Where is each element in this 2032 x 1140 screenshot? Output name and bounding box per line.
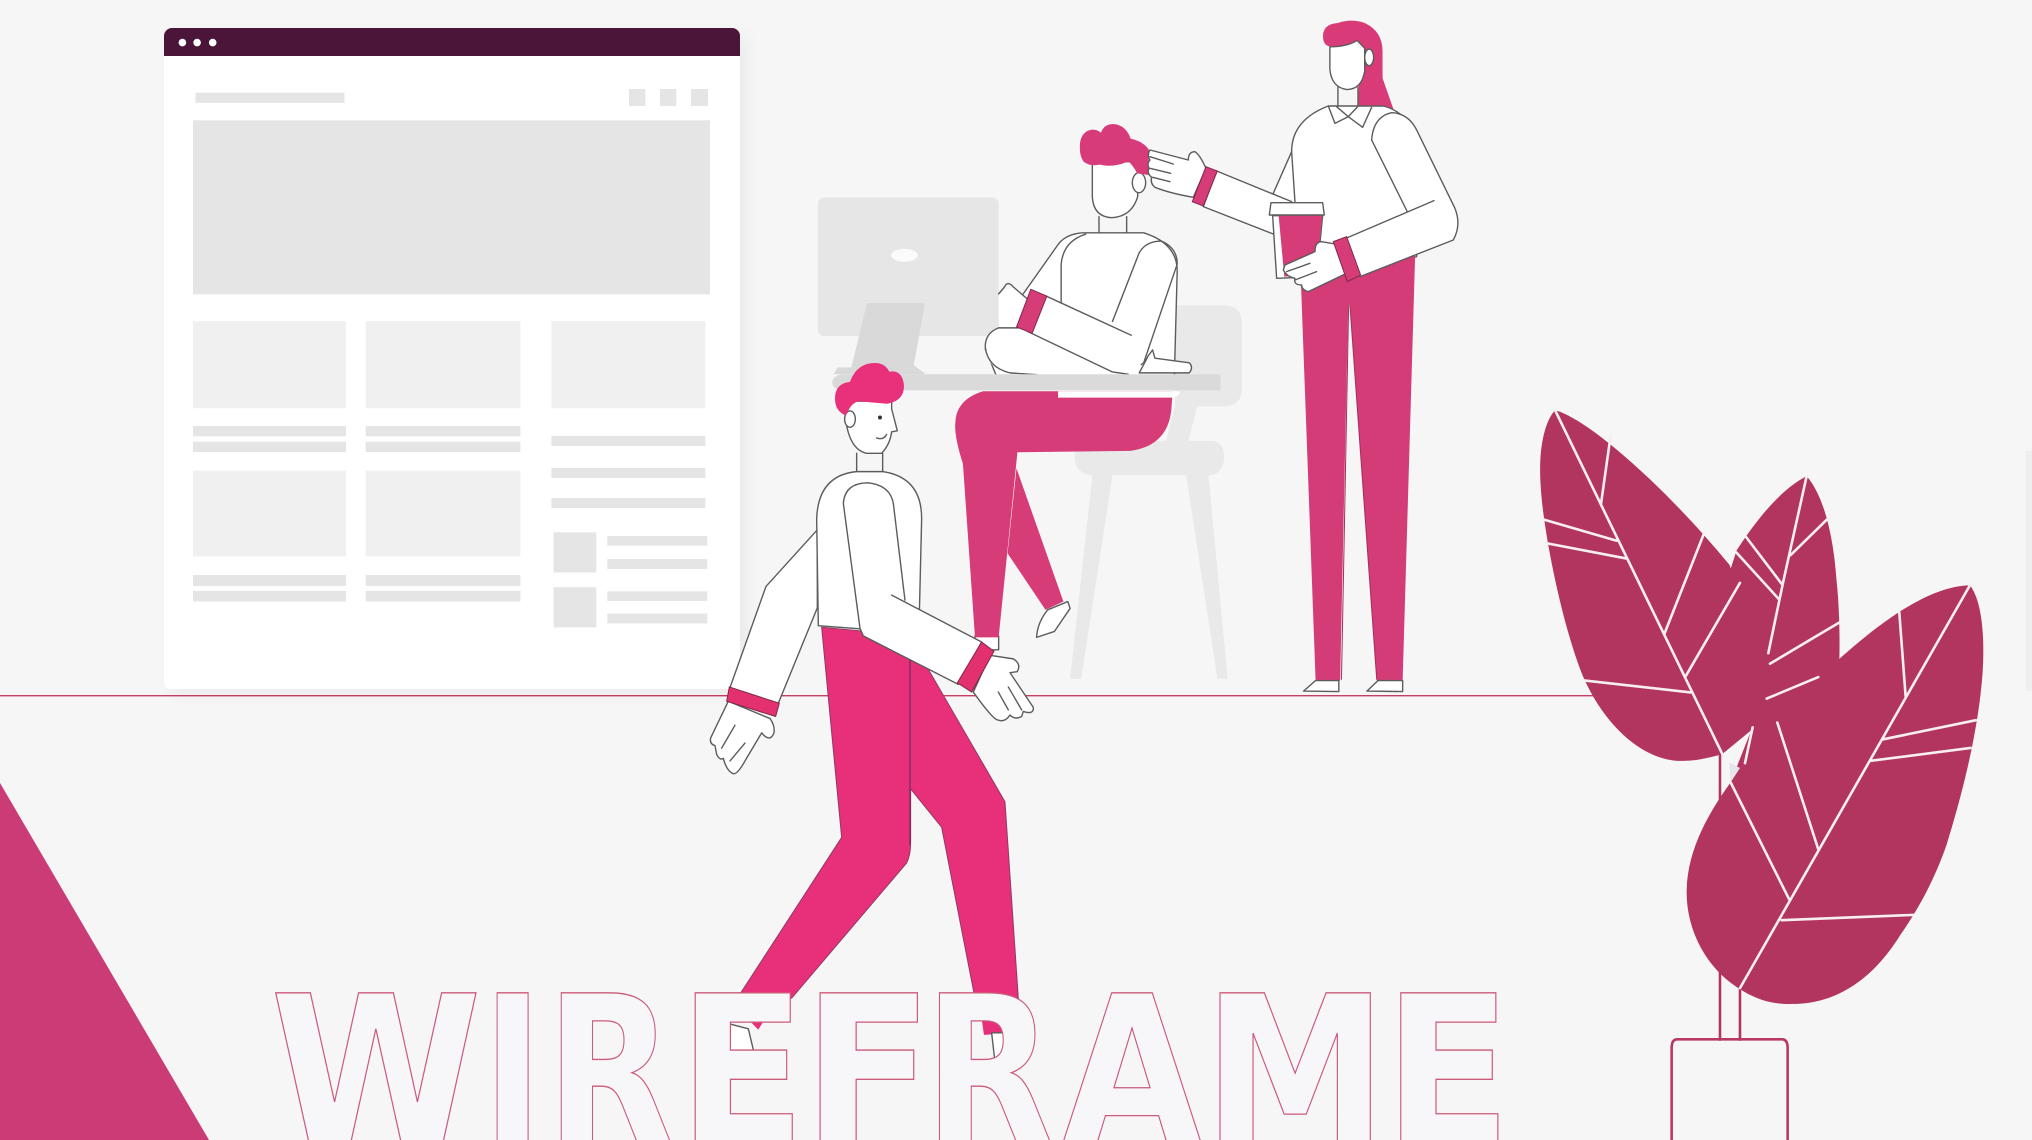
- torso: [985, 233, 1177, 387]
- near cuff: [957, 642, 994, 692]
- shoes: [1304, 681, 1403, 692]
- hair: [835, 363, 904, 416]
- desk: [832, 374, 1221, 390]
- hair: [1323, 21, 1395, 113]
- content cards: [193, 321, 705, 602]
- leaf left: [1540, 410, 1787, 761]
- plant pot: [1672, 1039, 1788, 1140]
- character: walking man: [710, 363, 1033, 1064]
- cuff: [1017, 289, 1047, 333]
- browser title bar: [164, 28, 740, 56]
- leaf veins: [1543, 410, 1976, 988]
- trouser edges: [1341, 305, 1377, 680]
- ear: [1365, 49, 1374, 66]
- head and hair: [1323, 21, 1395, 113]
- feet seen through counters: [725, 1016, 1017, 1064]
- torso: [817, 472, 922, 629]
- cup hand: [1283, 242, 1347, 292]
- character: seated designer body: [832, 233, 1221, 650]
- reaching hand: [1148, 150, 1206, 197]
- far cuff: [727, 687, 779, 717]
- rear leg: [1008, 468, 1063, 610]
- far hand: [710, 701, 774, 774]
- head: [845, 401, 897, 453]
- collar: [1328, 106, 1372, 127]
- character: standing woman: [1148, 21, 1458, 692]
- ground line: [0, 695, 1620, 696]
- shirt hem and lower hand: [1058, 391, 1180, 398]
- edge sliver: [2026, 451, 2032, 691]
- reaching arm: [1203, 171, 1292, 234]
- leaf middle: [1727, 476, 1840, 735]
- header placeholders: [196, 89, 708, 106]
- icon: chair: [1070, 305, 1242, 679]
- coffee cup: [1269, 203, 1324, 278]
- hand on desk: [1139, 350, 1191, 373]
- ear: [1132, 173, 1146, 193]
- smile: [877, 434, 887, 439]
- front shoe: [975, 636, 999, 650]
- leaf notch: [1729, 762, 1740, 782]
- seated scene: [818, 197, 1242, 679]
- sidebar placeholders: [551, 436, 707, 627]
- eye: [878, 416, 882, 420]
- neck: [857, 453, 883, 472]
- ear: [845, 411, 855, 427]
- character: seated designer head: [1080, 124, 1149, 232]
- forearm: [985, 287, 1144, 374]
- neck: [1099, 217, 1127, 232]
- near cuff: [1333, 237, 1361, 282]
- neck: [1338, 87, 1358, 107]
- leaf right: [1687, 585, 1983, 1004]
- plant: [1540, 410, 1983, 1140]
- decorative triangle: [0, 783, 209, 1140]
- trousers: [1301, 255, 1415, 681]
- trousers: [737, 627, 1018, 998]
- hero image placeholder: [193, 120, 710, 294]
- reaching cuff: [1192, 167, 1217, 206]
- icon: desktop monitor: [818, 197, 999, 374]
- seated thigh and leg: [955, 391, 1173, 637]
- panel: browser wireframe: [164, 28, 746, 694]
- torso: [1273, 106, 1420, 287]
- hair: [1080, 124, 1149, 175]
- far arm: [729, 530, 817, 703]
- plant stems: [1720, 754, 1740, 1041]
- near arm: [843, 483, 982, 684]
- face: [1330, 40, 1365, 90]
- face: [1092, 162, 1138, 218]
- near hand: [973, 655, 1033, 721]
- near arm: [1347, 113, 1458, 277]
